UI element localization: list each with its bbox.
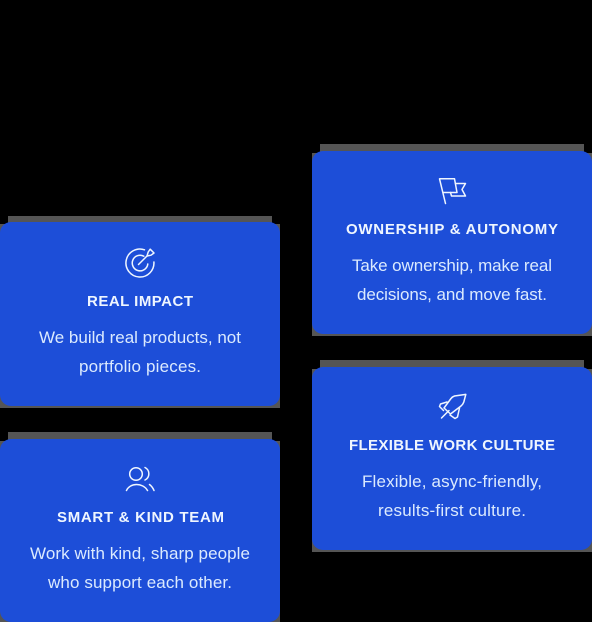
text: ownership and autonomy description: decisions, and move fast. [357, 285, 547, 304]
heading: flexible work culture: FLEXIBLE WORK CULTURE [349, 437, 555, 454]
text: smart and kind team description [30, 544, 250, 592]
panel: ownership and autonomy [312, 144, 592, 336]
text: flexible work culture description: Flexible, async-friendly, [362, 472, 542, 491]
text: ownership and autonomy description: Take ownership, make real [352, 256, 552, 275]
panel: smart and kind team [0, 432, 280, 622]
icon: people [126, 468, 154, 490]
heading: real impact: REAL IMPACT [87, 293, 193, 310]
icon: rocket [440, 394, 466, 418]
text: smart and kind team description: Work with kind, sharp people [30, 544, 250, 563]
text: smart and kind team description: who support each other. [47, 573, 232, 592]
heading: ownership and autonomy: OWNERSHIP & AUTONOMY [346, 221, 558, 238]
heading: smart and kind team: SMART & KIND TEAM [57, 509, 224, 526]
panel: flexible work culture [312, 360, 592, 552]
text: ownership and autonomy description [352, 256, 552, 304]
text: real impact description: portfolio pieces. [79, 357, 201, 376]
icon: flag [440, 179, 466, 204]
text: flexible work culture description [362, 472, 542, 520]
text: real impact description: We build real products, not [39, 328, 241, 347]
text: real impact description [39, 328, 241, 376]
icon: target with arrow [126, 249, 154, 277]
panel: real impact [0, 216, 280, 408]
text: flexible work culture description: results-first culture. [378, 501, 526, 520]
